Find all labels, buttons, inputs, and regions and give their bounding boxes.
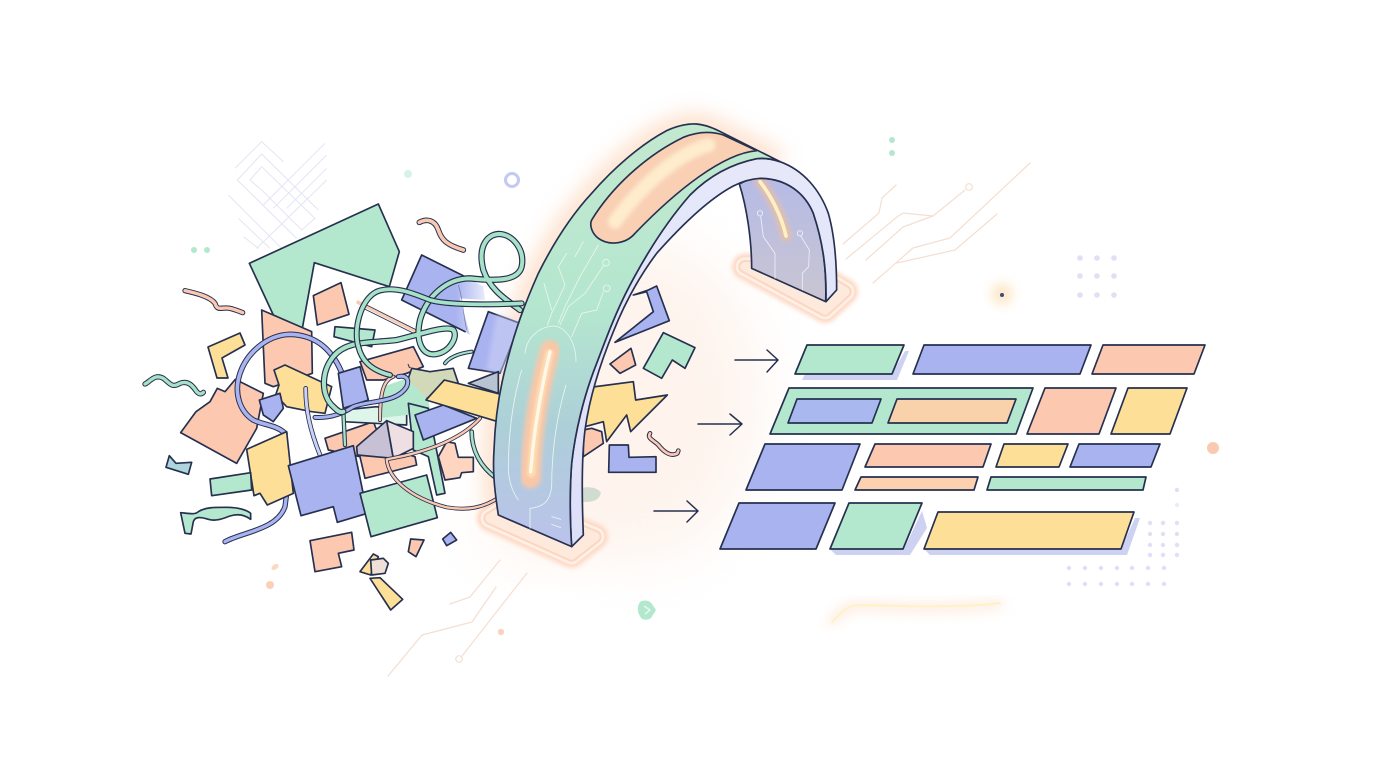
back circuit traces — [757, 211, 809, 290]
green rope second strand — [357, 289, 522, 375]
orange square — [313, 283, 349, 325]
yellow wedge — [426, 380, 503, 423]
small blue diamond — [443, 532, 457, 546]
lavender dot grid top right — [1077, 255, 1117, 298]
row 2 green container — [770, 388, 1033, 434]
row 5 yellow — [924, 512, 1134, 549]
green rope right — [472, 432, 497, 478]
green ribbon — [181, 507, 251, 534]
big green block — [360, 475, 437, 537]
blue vertical block — [338, 367, 368, 408]
row 4 green thin — [987, 477, 1146, 490]
lower glow pill — [531, 350, 550, 478]
row 5 shadows — [830, 511, 927, 555]
green rope connector — [445, 352, 472, 363]
row 2 yellow block — [1111, 388, 1187, 434]
blue wedge — [415, 405, 477, 440]
lavender dot grid bottom right — [1067, 488, 1179, 586]
yellow triangle — [370, 578, 403, 610]
upper glow pill — [591, 132, 757, 243]
blue rope ring — [237, 334, 343, 433]
green stripe — [408, 403, 445, 495]
squiggle: orange top left — [185, 291, 243, 313]
right base pad — [745, 267, 845, 310]
yellow chip — [360, 554, 378, 575]
green bar small — [334, 327, 375, 347]
yellow big left — [247, 432, 293, 505]
orange rope vertical — [380, 377, 393, 420]
orange shard — [610, 348, 636, 373]
yellow L bracket — [208, 333, 245, 378]
pale blob — [580, 487, 601, 502]
chaos debris: squiggles and outer fragments — [145, 204, 473, 610]
row 2 orange block — [1027, 388, 1116, 434]
glowing streak — [832, 603, 1000, 622]
big green polygon — [249, 204, 399, 328]
orange bottom piece — [310, 532, 354, 572]
orange panel — [262, 310, 312, 387]
row 3 large blue — [746, 444, 860, 490]
row 3 orange — [865, 444, 991, 467]
pale green band — [343, 407, 407, 425]
arch front — [494, 124, 837, 547]
arrow 3 — [654, 501, 698, 522]
prism left face — [357, 421, 393, 458]
blue rope center — [315, 376, 408, 417]
dark speck — [408, 364, 411, 367]
blue L shape — [609, 445, 656, 472]
orange upper block — [360, 347, 423, 380]
green tangled rope — [324, 234, 522, 412]
upper blue wedge — [334, 255, 485, 347]
arch inner lavender edge — [570, 158, 837, 547]
fragments past the arch — [553, 286, 695, 502]
green bar — [210, 473, 252, 496]
orange small behind arch — [583, 428, 603, 457]
arrow 1 — [735, 350, 778, 372]
arrows — [654, 350, 778, 522]
row 1 green block — [795, 345, 904, 374]
yellow jagged piece — [274, 365, 332, 413]
background glow — [480, 240, 760, 560]
pale cap — [371, 558, 388, 575]
arrow 2 — [698, 414, 742, 435]
row 4 orange thin — [855, 477, 978, 490]
blue rope tail — [225, 493, 287, 542]
row 2 inner orange — [888, 399, 1016, 423]
decorative circuit lines top right — [843, 163, 1030, 283]
row 2 inner blue — [788, 399, 881, 423]
orange rope — [387, 418, 500, 509]
green L shape — [643, 333, 695, 378]
upper right blue block — [468, 312, 523, 373]
yellow lightning — [553, 382, 667, 442]
pale orange stripe — [357, 302, 417, 332]
orange rear block — [325, 422, 417, 478]
arch back face — [739, 178, 826, 302]
big blue block — [288, 446, 367, 522]
prism right face — [387, 421, 413, 458]
green blob — [638, 601, 656, 620]
decorative dots — [191, 137, 1219, 635]
arch green surface — [494, 124, 780, 547]
gray triangle — [468, 372, 498, 393]
diamond line pattern — [228, 142, 327, 253]
arch glow — [494, 124, 780, 515]
squiggle: green wave — [145, 377, 203, 394]
green center — [378, 378, 430, 418]
row 5 blue — [720, 503, 835, 549]
row 5 green — [830, 503, 922, 549]
decorative circuit lines bottom left — [388, 560, 527, 676]
row 1 blue block — [913, 345, 1091, 374]
green rope down — [343, 412, 345, 445]
row 3 yellow — [996, 444, 1068, 467]
orange notched piece — [181, 379, 263, 463]
glowing dot — [992, 284, 1012, 304]
row 5 yellow shadow — [924, 518, 1140, 555]
blue shard — [615, 286, 669, 342]
olive piece — [407, 368, 458, 400]
front debris wedges — [315, 352, 503, 509]
row 1 orange block — [1092, 345, 1205, 374]
row 3 blue — [1070, 444, 1160, 467]
squiggle: orange top — [419, 220, 463, 250]
teal chevron — [166, 456, 192, 474]
structured grid — [720, 345, 1205, 555]
pale blue stick — [306, 388, 320, 455]
orange squiggle — [649, 433, 678, 455]
arch base pads and back face — [490, 124, 845, 555]
orange right steps — [438, 442, 473, 480]
back glow strip — [760, 182, 786, 236]
row 1 shadow — [802, 351, 909, 380]
small orange piece — [408, 539, 424, 557]
circuit traces — [508, 242, 610, 528]
left base pad — [490, 503, 595, 555]
small blue piece — [259, 393, 283, 422]
